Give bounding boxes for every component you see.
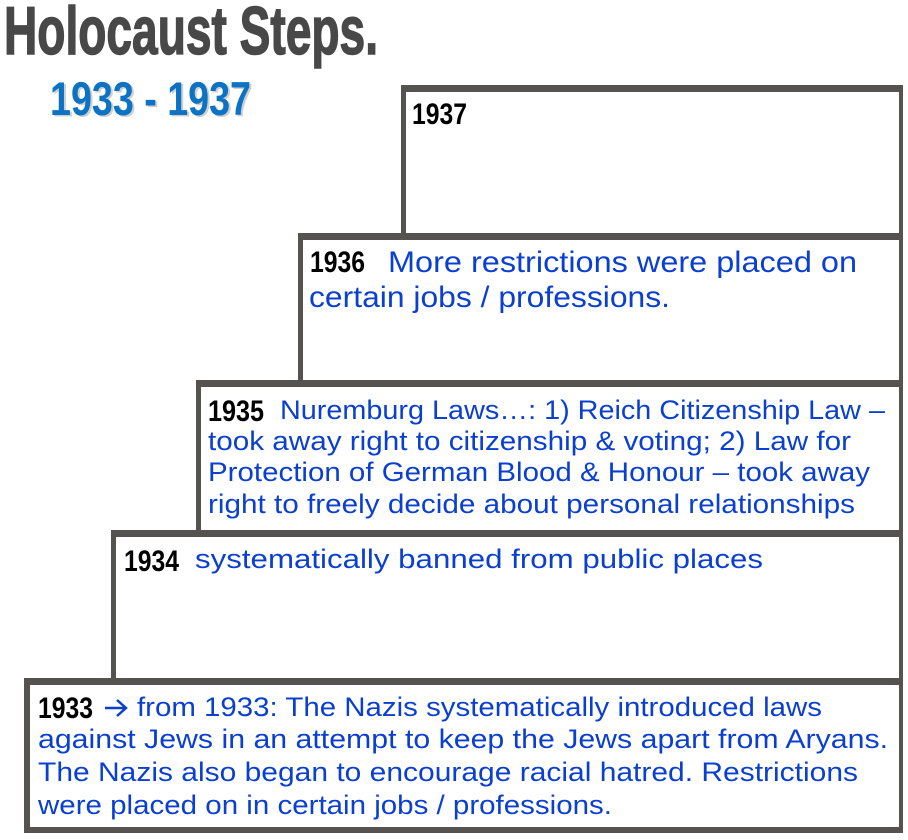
text: 1933 laws against Jews: were placed on in certain jobs / professions.: [37, 790, 612, 820]
subtitle: date range: 1933 - 1937: [50, 72, 251, 125]
text: Nuremburg Laws: Nuremburg Laws…: 1) Reich Citizenship Law –: [280, 395, 885, 425]
icon: arrow: [105, 700, 126, 716]
panel: step 1936: [298, 233, 903, 387]
panel: step 1933: [24, 678, 903, 833]
panel: step 1937: [401, 85, 903, 240]
text: Nuremburg Laws: took away right to citizenship & voting; 2) Law for: [208, 426, 851, 456]
text: 1933 laws against Jews: [37, 692, 888, 820]
text: Nuremburg Laws: Protection of German Blood & Honour – took away: [208, 457, 871, 487]
text: Nuremburg Laws: [208, 395, 885, 519]
panel: step 1934: [111, 530, 903, 685]
text: 1933 laws against Jews: The Nazis also began to encourage racial hatred. Restrictions: [38, 757, 858, 787]
year 1937: 1937: [412, 98, 467, 131]
year 1935: 1935: [208, 395, 264, 428]
text: 1936 restrictions: More restrictions were placed on: [388, 246, 857, 279]
text: 1936 restrictions: [309, 246, 857, 314]
text: 1936 restrictions: certain jobs / professions.: [309, 281, 670, 314]
year 1933: 1933: [38, 692, 93, 725]
text: 1933 laws against Jews: from 1933: The Nazis systematically introduced laws: [137, 692, 822, 722]
text: 1933 laws against Jews: against Jews in an attempt to keep the Jews apart from Aryans.: [38, 724, 888, 754]
text: Nuremburg Laws: right to freely decide about personal relationships: [208, 489, 855, 519]
year 1936: 1936: [310, 246, 365, 279]
subtitle: date range: 1933 - 1937: [52, 74, 253, 126]
year 1934: 1934: [124, 545, 179, 578]
panel: step 1935: [196, 380, 903, 537]
text: banned from public places: systematically banned from public places: [195, 544, 763, 574]
